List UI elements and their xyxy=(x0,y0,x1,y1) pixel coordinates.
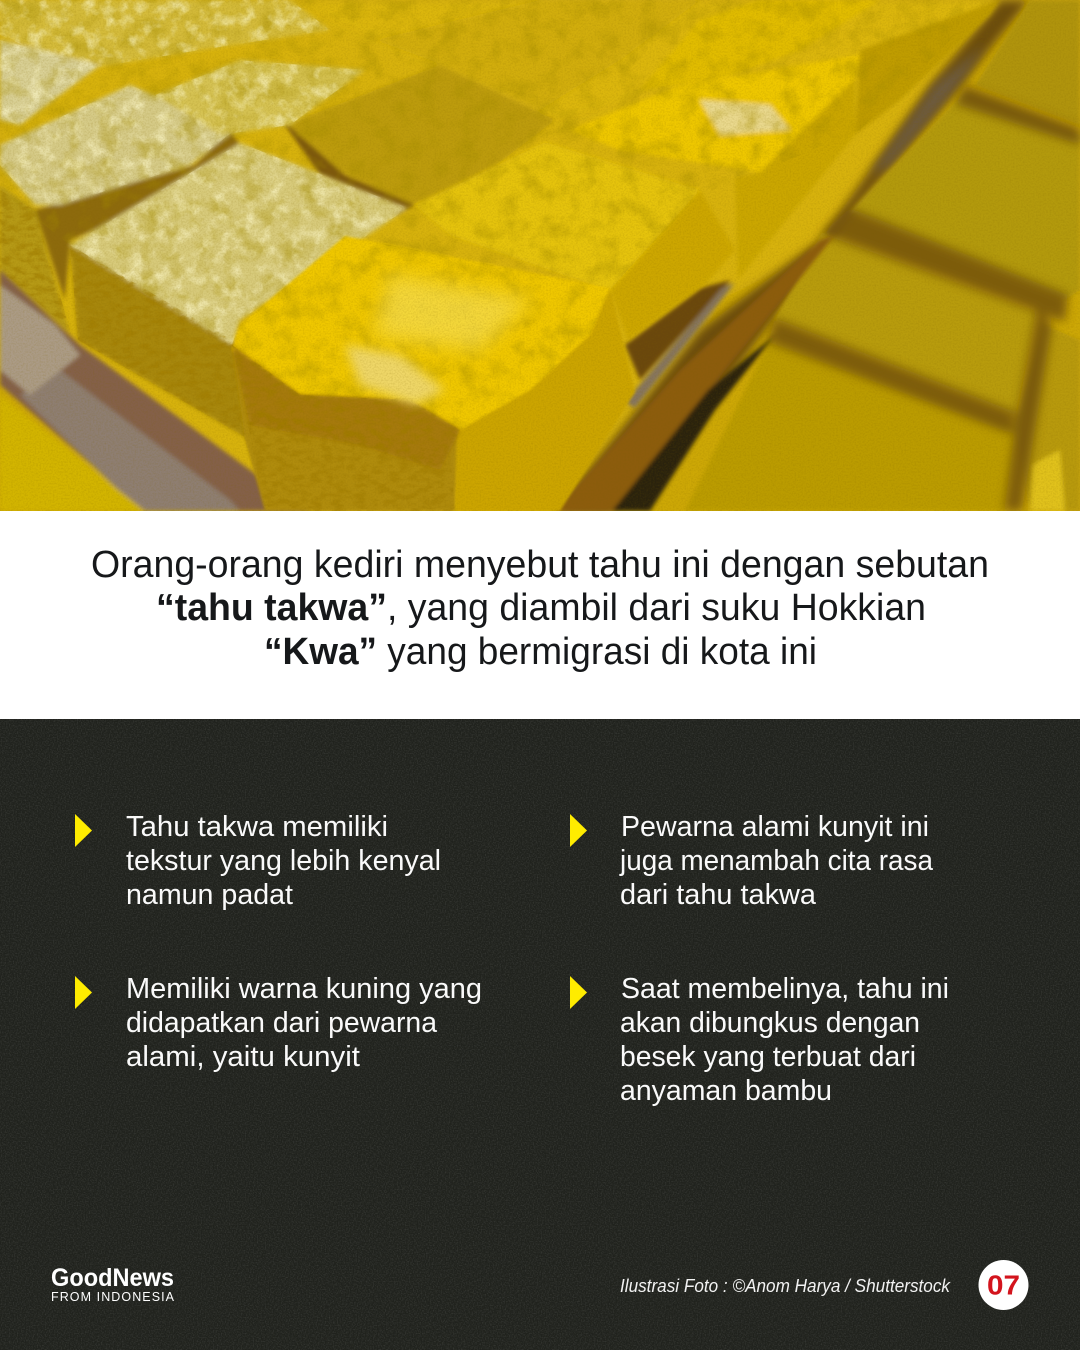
heading text: “tahu takwa”, yang diambil dari suku Hokkian xyxy=(156,587,926,629)
bullet text xyxy=(126,973,482,1073)
bullet text: didapatkan dari pewarna xyxy=(126,1007,438,1039)
bullet: warna kuning xyxy=(75,973,482,1073)
bullet text: tekstur yang lebih kenyal xyxy=(126,845,441,877)
bullet text: anyaman bambu xyxy=(620,1075,832,1107)
bullet text: Tahu takwa memiliki xyxy=(126,811,388,843)
dark gaps between right blocks xyxy=(768,85,1080,511)
photo credit: Ilustrasi Foto : ©Anom Harya / Shutterstock xyxy=(620,1276,951,1296)
bullet text: besek yang terbuat dari xyxy=(620,1041,916,1073)
right olive tofu blocks xyxy=(685,0,1080,511)
page number badge xyxy=(978,1260,1028,1310)
bullet text xyxy=(619,811,934,911)
wood beam lower left xyxy=(0,270,310,511)
heading text: “Kwa” yang bermigrasi di kota ini xyxy=(264,631,817,673)
icon: yellow arrow xyxy=(570,814,587,847)
left-column tofu blocks xyxy=(0,0,1000,440)
pale top far-left xyxy=(0,85,235,205)
bullet text: namun padat xyxy=(126,879,293,911)
bullet text: alami, yaitu kunyit xyxy=(126,1041,360,1073)
white heading panel xyxy=(0,511,1080,719)
bullet text: Saat membelinya, tahu ini xyxy=(621,973,949,1005)
bullet text: dari tahu takwa xyxy=(620,879,817,911)
bullet: besek xyxy=(570,973,949,1107)
front tofu block xyxy=(220,230,635,511)
icon: yellow arrow xyxy=(570,976,587,1009)
photo film grain xyxy=(0,0,1080,511)
logo: GoodNews from Indonesia xyxy=(51,1264,175,1304)
bullet text: Memiliki warna kuning yang xyxy=(126,973,482,1005)
bullet text xyxy=(126,811,441,911)
icon: yellow arrow xyxy=(75,976,92,1009)
bullet text: akan dibungkus dengan xyxy=(620,1007,920,1039)
bullet text: juga menambah cita rasa xyxy=(619,845,934,877)
bullet text: Pewarna alami kunyit ini xyxy=(621,811,929,843)
bullet: cita rasa xyxy=(570,811,934,911)
dark information panel xyxy=(0,719,1080,1350)
heading text xyxy=(91,544,989,673)
icon: yellow arrow xyxy=(75,814,92,847)
logo: GoodNews from Indonesia: FROM INDONESIA xyxy=(51,1290,175,1304)
bullet text xyxy=(620,973,949,1107)
page number badge: 07 xyxy=(987,1270,1020,1300)
logo: GoodNews from Indonesia: GoodNews xyxy=(51,1264,174,1292)
soft texture on upper blocks xyxy=(0,0,963,338)
photo: yellow turmeric tofu blocks xyxy=(0,0,1080,511)
wood rack centre strip xyxy=(555,235,835,511)
centre block xyxy=(415,142,700,292)
heading text: Orang-orang kediri menyebut tahu ini dengan sebutan xyxy=(91,544,989,586)
bullet: tekstur xyxy=(75,811,441,911)
upper right bright block xyxy=(570,55,860,172)
pale top second block xyxy=(70,143,408,345)
upper-right gutter and wood rail xyxy=(556,0,1030,511)
